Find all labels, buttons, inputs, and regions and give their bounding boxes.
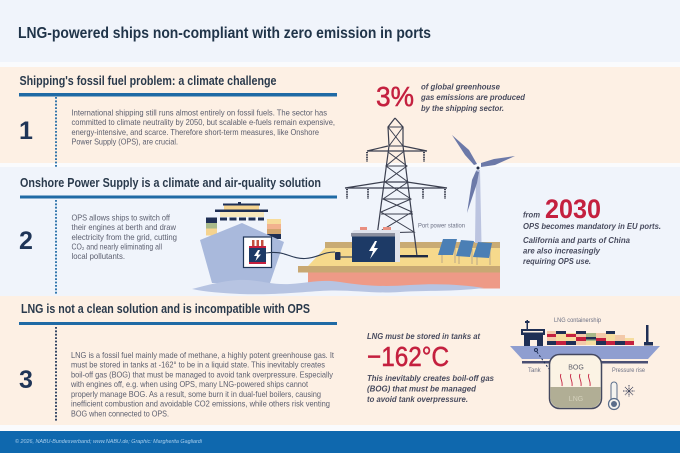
callout: minus 162 degrees (367, 331, 494, 404)
body text 3: boil-off gas (BOG) that must be managed to avoid tank overpressure. Especially (71, 370, 334, 380)
callout: 2030: requiring OPS use. (523, 256, 591, 266)
label: port power station: Port power station (418, 224, 465, 230)
number 3: 3 (19, 366, 33, 394)
body text 2: OPS allows ships to switch off (72, 212, 171, 222)
callout: minus 162 degrees: −162°C (367, 341, 449, 372)
label: pressure rise: Pressure rise (612, 368, 646, 374)
label: LNG containership: LNG containership (554, 318, 602, 324)
label: tank: Tank (528, 368, 542, 374)
callout: minus 162 degrees: This inevitably creates boil-off gas (367, 373, 494, 383)
heading 1: Shipping's fossil fuel problem: a climate challenge (20, 74, 277, 88)
body text 2: CO₂ and nearly eliminating all (72, 242, 162, 252)
icon: thermometer (608, 382, 620, 410)
body text 3: inefficient combustion and avoidable CO2 emissions, while others risk venting (71, 398, 330, 408)
body text 1: energy-intensive, and scarce. Therefore short-term measures, like Onshore (72, 127, 319, 137)
body text 1: Power Supply (OPS), are crucial. (72, 136, 178, 146)
number 1: 1 (19, 117, 33, 145)
callout: 3 percent: 3% (376, 81, 414, 112)
icon: electricity pylon (345, 118, 447, 257)
icon: battery power station (351, 227, 400, 262)
tank: BOG (568, 364, 584, 372)
body text 3: LNG is a fossil fuel mainly made of methane, a highly potent greenhouse gas. It (71, 350, 335, 360)
callout: 3 percent: gas emissions are produced (420, 92, 526, 102)
callout: 2030 (523, 194, 661, 266)
cable (266, 252, 335, 259)
callout: minus 162 degrees: (BOG) that must be managed (367, 384, 477, 394)
callout: minus 162 degrees: to avoid tank overpressure. (367, 394, 468, 404)
bridge (521, 320, 545, 346)
illustration: port platform (298, 242, 500, 288)
icon: snowflake (623, 385, 635, 397)
body text 2: their engines at berth and draw (72, 222, 177, 232)
body text 2: local pollutants. (72, 251, 125, 261)
icon: plug (335, 252, 352, 260)
water (192, 280, 484, 294)
panel: LNG not clean (0, 296, 680, 425)
body text 3: BOG when connected to OPS. (71, 408, 169, 418)
icon: ship (200, 202, 284, 283)
tank: LNG (569, 396, 583, 403)
body text 3 (70, 350, 335, 418)
footer: © 2026, NABU-Bundesverband; www.NABU.de; Graphic: Margherita Gagliardi (15, 438, 203, 445)
body text 3: must be stored in tanks at -162° to be in a liquid state. This inevitably creates (71, 360, 325, 370)
panel: shipping's fossil fuel problem (0, 67, 680, 168)
callout: minus 162 degrees: LNG must be stored in tanks at (367, 331, 481, 341)
heading 3: LNG is not a clean solution and is incompatible with OPS (21, 302, 310, 316)
body text 1: International shipping still runs almost entirely on fossil fuels. The sector has (72, 108, 327, 118)
callout: 2030: OPS becomes mandatory in EU ports. (523, 221, 661, 231)
body text 1: committed to climate neutrality by 2050, but scalable e-fuels remain expensive, (72, 117, 335, 127)
body text 1 (72, 108, 335, 146)
icon: transformer (249, 240, 266, 264)
callout: 3 percent (376, 81, 526, 113)
containers (547, 331, 634, 345)
tank (550, 354, 602, 408)
icon: wind turbine (452, 135, 515, 243)
number 2: 2 (19, 227, 33, 255)
tank pointer (534, 348, 549, 369)
body text 3: properly manage BOG. As a result, some burn it in dual-fuel boilers, causing (71, 389, 321, 399)
body text 3: with engines off, e.g. when using OPS, many LNG-powered ships cannot (70, 379, 309, 389)
callout: 2030: from (523, 210, 540, 220)
heading 2: Onshore Power Supply is a climate and air-quality solution (20, 176, 321, 190)
hull (510, 346, 660, 359)
panel: onshore power supply (0, 167, 680, 296)
callout: 3 percent: of global greenhouse (421, 82, 500, 92)
funnel (644, 325, 653, 346)
body text 2: electricity from the grid, cutting (72, 232, 177, 242)
footer (0, 431, 680, 453)
title band (0, 0, 680, 62)
callout: 2030: are also increasingly (523, 246, 601, 256)
callout: 2030: 2030 (545, 194, 601, 224)
body text 2 (72, 212, 177, 261)
icon: solar panels (438, 239, 492, 265)
title: LNG-powered ships non-compliant with zero emission in ports (18, 25, 431, 42)
callout: 2030: California and parts of China (523, 235, 630, 245)
callout: 3 percent: by the shipping sector. (421, 103, 504, 113)
icon: LNG containership (510, 318, 660, 410)
